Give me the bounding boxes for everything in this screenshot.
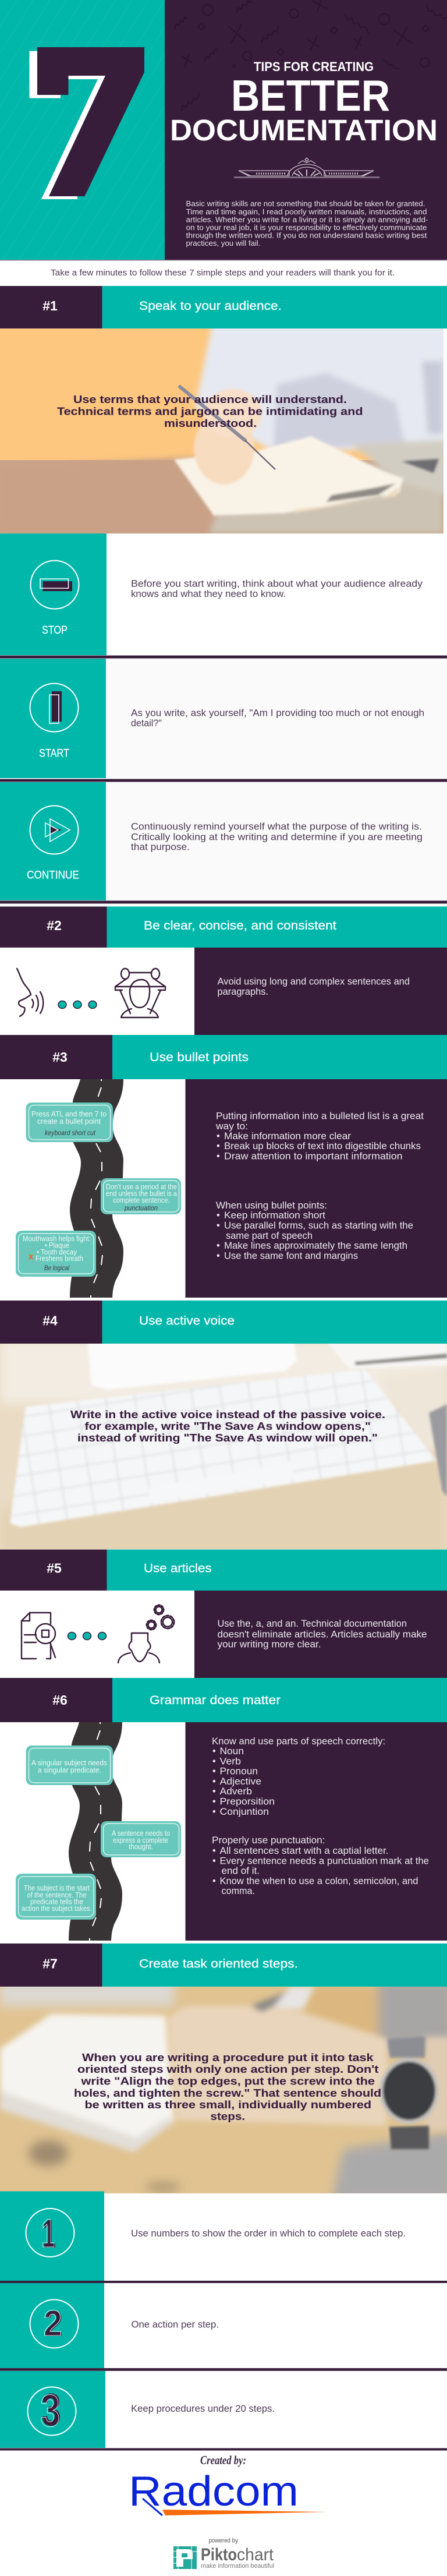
panel: stop: [0, 533, 423, 656]
text block: photo caption: Technical terms and jargon can be intimidating and: [57, 405, 363, 417]
heading: tip 5: [0, 1549, 447, 1591]
panel: tip 3 road: [16, 1079, 181, 1298]
icon: start: [30, 684, 78, 732]
icon: number 1: 1: [41, 2211, 55, 2256]
heading: tip 6: [0, 1678, 447, 1722]
panel: tip 6 text: Verb: [220, 1757, 241, 1767]
icon: number 2: [30, 2299, 78, 2348]
divider: [0, 900, 447, 904]
callout: keyboard short cut: create a bullet point: [37, 1117, 101, 1125]
callout: be logical: • Tooth decay: [37, 1248, 77, 1256]
panel: tip 6 text: Preporsition: [220, 1796, 275, 1807]
callout: be logical: Mouthwash helps fight:: [23, 1235, 91, 1243]
panel: tip 6 text: comma.: [221, 1886, 255, 1896]
decorative doodles: [175, 0, 447, 111]
big numeral 7: [29, 47, 144, 199]
text block: stop: Before you start writing, think about what your audience already: [131, 579, 423, 589]
text block: watch caption: oriented steps with only one action per step. Don't: [77, 2063, 379, 2075]
panel: tip 6 text: •: [212, 1746, 216, 1757]
panel: start: START: [39, 748, 69, 759]
divider: [0, 2368, 447, 2371]
callout: complete thought: thought.: [129, 1843, 153, 1851]
panel: header teal with big seven: [0, 0, 165, 260]
text block: watch caption: When you are writing a procedure put it into task: [82, 2052, 374, 2063]
icon: number 1: 1: [42, 2211, 56, 2256]
callout: singular subject: [26, 1745, 113, 1785]
panel: tip 6 text: •: [212, 1757, 216, 1767]
text block: tip 2: Avoid using long and complex sentences and: [218, 976, 410, 987]
text block: continue: Critically looking at the writing and determine if you are meeting: [131, 832, 423, 842]
callout: keyboard short cut: [26, 1103, 113, 1142]
heading: tip 6: Grammar does matter: [150, 1694, 281, 1707]
panel: tip 6 road: [16, 1722, 181, 1941]
callout: subject and predicate: predicate tells the: [30, 1897, 83, 1906]
panel: photo of person writing: [0, 323, 447, 533]
callout: punctuation: Don't use a period at the: [106, 1183, 177, 1191]
panel: tip 3 text: Make information more clear: [224, 1131, 352, 1142]
heading: tip 2: Be clear, concise, and consistent: [144, 919, 336, 932]
heading: tip 2: #2: [47, 918, 62, 933]
text block: photo caption: Use terms that your audience will understand.: [73, 394, 347, 405]
panel: tip 6 text: Adverb: [220, 1786, 252, 1797]
text block: continue: that purpose.: [131, 842, 190, 853]
title: TIPS FOR CREATING: [254, 59, 374, 74]
panel: tip 3 text: When using bullet points:: [216, 1200, 327, 1211]
callout: subject and predicate: The subject is the start: [24, 1884, 90, 1892]
panel: tip 6 text: Know the when to use a colon, semicolon, and: [220, 1876, 418, 1886]
callout: subject and predicate: of the sentence. The: [27, 1891, 87, 1899]
callout: singular subject: a singular predicate.: [38, 1766, 101, 1774]
panel: tip 3 text: •: [217, 1141, 220, 1151]
text block: introduction: Basic writing skills are not something that should be taken for granted.: [186, 200, 425, 208]
panel: tip 3 text: •: [217, 1151, 220, 1161]
heading: tip 1: Speak to your audience.: [139, 299, 282, 313]
panel: tip 3 text: Use parallel forms, such as starting with the: [224, 1221, 413, 1231]
title: [170, 59, 438, 147]
heading: tip 7: [0, 1944, 447, 1987]
text block: introduction: on to your real job, it is your responsibility to effectively communicate: [186, 224, 427, 232]
title: BETTER: [231, 71, 390, 120]
icon: number 3: 3: [41, 2384, 61, 2435]
icon: listener with headset: [115, 969, 165, 1017]
heading: tip 2: [0, 906, 447, 948]
icon: document with magnifier: [22, 1613, 55, 1659]
panel: tip 6 text: Pronoun: [220, 1766, 258, 1776]
panel: tip 3 text: •: [217, 1210, 220, 1221]
panel: tip 6 text: •: [212, 1846, 216, 1856]
panel: tip 3 text: •: [217, 1241, 220, 1251]
title: DOCUMENTATION: [170, 114, 438, 147]
text block: watch caption: be written as three small, individually numbered: [85, 2099, 371, 2111]
subtitle line: Take a few minutes to follow these 7 simple steps and your readers will thank you for it.: [51, 268, 395, 278]
panel: header purple: [165, 0, 447, 260]
panel: tip 6 text: All sentences start with a captial letter.: [220, 1846, 389, 1856]
heading: tip 4: #4: [42, 1313, 58, 1328]
icon: speaking head: [17, 969, 43, 1016]
divider: [0, 779, 447, 782]
panel: tip 6 text: end of it.: [221, 1866, 260, 1877]
heading: tip 7: #7: [42, 1956, 58, 1971]
panel: tip 5 content: [22, 1591, 447, 1678]
panel: tip 3 text: [185, 1079, 447, 1298]
callout: subject and predicate: [16, 1874, 96, 1920]
callout: subject and predicate: action the subject takes.: [22, 1904, 92, 1913]
callout: punctuation: end unless the bullet is a: [106, 1189, 177, 1197]
text block: watch caption: holes, and tighten the screw." That sentence should: [74, 2087, 381, 2099]
icon: ornament: [234, 158, 379, 178]
text block: start: As you write, ask yourself, "Am I providing too much or not enough: [131, 708, 424, 719]
text block: tip 5: [218, 1619, 427, 1649]
text block: tip 2: [218, 976, 410, 997]
text block: continue: Continuously remind yourself what the purpose of the writing is.: [131, 821, 422, 832]
text block: start: detail?": [131, 718, 162, 729]
panel: tip 3 text: Draw attention to important information: [224, 1151, 403, 1161]
icon: continue: [30, 806, 78, 854]
callout: be logical: Freshens breath: [36, 1255, 83, 1263]
text block: step 1: Use numbers to show the order in which to complete each step.: [131, 2228, 406, 2239]
text block: photo caption: [57, 394, 363, 429]
heading: tip 3: [0, 1035, 447, 1079]
text block: continue: [131, 821, 423, 853]
icon: number 1: [26, 2208, 74, 2257]
heading: tip 3: #3: [52, 1050, 68, 1065]
callout: punctuation: punctuation: [124, 1204, 158, 1212]
text block: tip 5: doesn't eliminate articles. Articles actually make: [218, 1630, 427, 1640]
text block: introduction: Time and time again, I read poorly written manuals, instructions, and: [186, 208, 427, 216]
icon: stop: [30, 560, 79, 609]
panel: tip 3 text: •: [217, 1131, 220, 1142]
panel: step 3: [0, 2371, 275, 2448]
text block: introduction: articles. Whether you write for a living or it is simply an annoying add-: [186, 215, 428, 224]
heading: tip 7: Create task oriented steps.: [139, 1957, 298, 1971]
panel: tip 6 text: •: [212, 1786, 216, 1797]
panel: step 1: [0, 2191, 406, 2281]
heading: tip 3: Use bullet points: [150, 1051, 249, 1064]
heading: tip 5: Use articles: [144, 1562, 212, 1575]
text block: introduction: through the written word. If you do not understand basic writing best: [186, 232, 427, 240]
panel: tip 3 text: way to:: [215, 1121, 248, 1132]
logo: Piktochart: make information beautiful: [201, 2563, 274, 2570]
callout: punctuation: [101, 1178, 181, 1214]
text block: watch caption: write "Align the top edges, put the screw into the: [80, 2076, 375, 2087]
heading: tip 1: #1: [42, 298, 58, 313]
panel: tip 2 content: [17, 948, 447, 1035]
text block: step 3: Keep procedures under 20 steps.: [131, 2404, 275, 2414]
panel: tip 6 text: Know and use parts of speech correctly:: [212, 1736, 385, 1747]
panel: tip 3 text: Keep information short: [224, 1210, 325, 1221]
logo: Piktochart: chart: [237, 2545, 274, 2564]
divider: [0, 2281, 447, 2283]
callout: be logical: Be logical: [44, 1264, 69, 1272]
divider: [0, 655, 447, 659]
icon: dots: [68, 1632, 106, 1640]
callout: punctuation: complete sentence.: [113, 1196, 170, 1204]
text block: keyboard caption: for example, write "The Save As window opens,": [85, 1420, 371, 1432]
panel: tip 6 text: •: [212, 1856, 216, 1866]
text block: start: [131, 708, 424, 729]
text block: stop: [131, 579, 423, 599]
text block: watch caption: [74, 2052, 381, 2122]
heading: tip 6: #6: [52, 1692, 68, 1708]
text block: step 2: One action per step.: [132, 2319, 219, 2330]
callout: complete thought: express a complete: [113, 1836, 168, 1844]
panel: tip 6 text: •: [212, 1876, 216, 1886]
callout: singular subject: A singular subject needs: [31, 1759, 107, 1767]
panel: step 2: [0, 2283, 219, 2368]
icon: number 2: 2: [44, 2304, 63, 2344]
divider: [0, 2448, 447, 2451]
panel: keyboard photo: [0, 1340, 447, 1561]
callout: complete thought: [101, 1821, 181, 1857]
panel: tip 6 text: •: [212, 1807, 216, 1817]
icon: number 3: 3: [40, 2385, 60, 2436]
panel: tip 6 text: •: [212, 1766, 216, 1776]
text block: watch caption: steps.: [211, 2111, 245, 2122]
panel: start: [0, 659, 447, 778]
logo: Radcom: Radcom: [129, 2468, 299, 2515]
heading: tip 1: [0, 286, 447, 328]
callout: be logical: • Plaque: [45, 1242, 69, 1250]
text block: tip 2: paragraphs.: [218, 987, 268, 997]
heading: tip 4: [0, 1301, 447, 1344]
text block: keyboard caption: Write in the active voice instead of the passive voice.: [70, 1409, 385, 1420]
text block: keyboard caption: [70, 1409, 385, 1444]
panel: tip 6 text: [185, 1722, 447, 1941]
panel: stop: STOP: [42, 624, 68, 637]
panel: continue: CONTINUE: [27, 869, 79, 882]
panel: tip 6 text: Every sentence needs a punctuation mark at the: [220, 1856, 429, 1866]
icon: number 3: [28, 2384, 76, 2436]
text block: photo caption: misunderstood.: [164, 418, 257, 429]
icon: dots: [58, 1001, 97, 1009]
icon: person with gears: [118, 1605, 174, 1663]
callout: keyboard short cut: Press ATL and then 7 to: [31, 1110, 107, 1118]
text block: tip 5: your writing more clear.: [218, 1639, 321, 1649]
logo: Piktochart: powered by: [208, 2537, 238, 2544]
panel: continue: [0, 782, 447, 900]
logo: Piktochart: [173, 2537, 274, 2570]
panel: tip 6 text: •: [212, 1776, 216, 1787]
panel: tip 3 text: •: [217, 1221, 220, 1231]
panel: tip 6 text: Noun: [220, 1746, 244, 1757]
panel: tip 6 text: Adjective: [220, 1776, 261, 1787]
heading: tip 5: #5: [47, 1561, 62, 1576]
callout: complete thought: A sentence needs to: [112, 1829, 170, 1838]
icon: number 2: 2: [43, 2303, 62, 2344]
text block: introduction: [186, 200, 428, 248]
panel: tip 6 text: Properly use punctuation:: [212, 1835, 325, 1846]
heading: tip 4: Use active voice: [139, 1314, 235, 1328]
panel: tip 6 text: •: [212, 1796, 216, 1807]
panel: tip 3 text: same part of speech: [226, 1231, 313, 1241]
panel: tip 3 text: Make lines approximately the same length: [224, 1241, 407, 1251]
panel: tip 3 text: •: [217, 1251, 220, 1262]
footer credit: Created by:: [200, 2453, 246, 2467]
panel: tip 3 text: Break up blocks of text into digestible chunks: [224, 1141, 421, 1151]
text block: tip 5: Use the, a, and an. Technical documentation: [218, 1619, 407, 1629]
callout: keyboard short cut: keyboard short cut: [45, 1129, 96, 1137]
callout: be logical: [16, 1231, 96, 1277]
panel: watch photo: [0, 1980, 447, 2202]
logo: Piktochart: Pikto: [201, 2545, 237, 2564]
text block: stop: knows and what they need to know.: [131, 589, 286, 599]
text block: keyboard caption: instead of writing "The Save As window will open.": [77, 1432, 378, 1444]
panel: tip 6 text: Conjuntion: [220, 1807, 269, 1817]
panel: tip 3 text: Putting information into a bulleted list is a great: [216, 1111, 424, 1122]
panel: tip 3 text: Use the same font and margins: [224, 1251, 358, 1262]
text block: introduction: practices, you will fail.: [186, 239, 261, 248]
